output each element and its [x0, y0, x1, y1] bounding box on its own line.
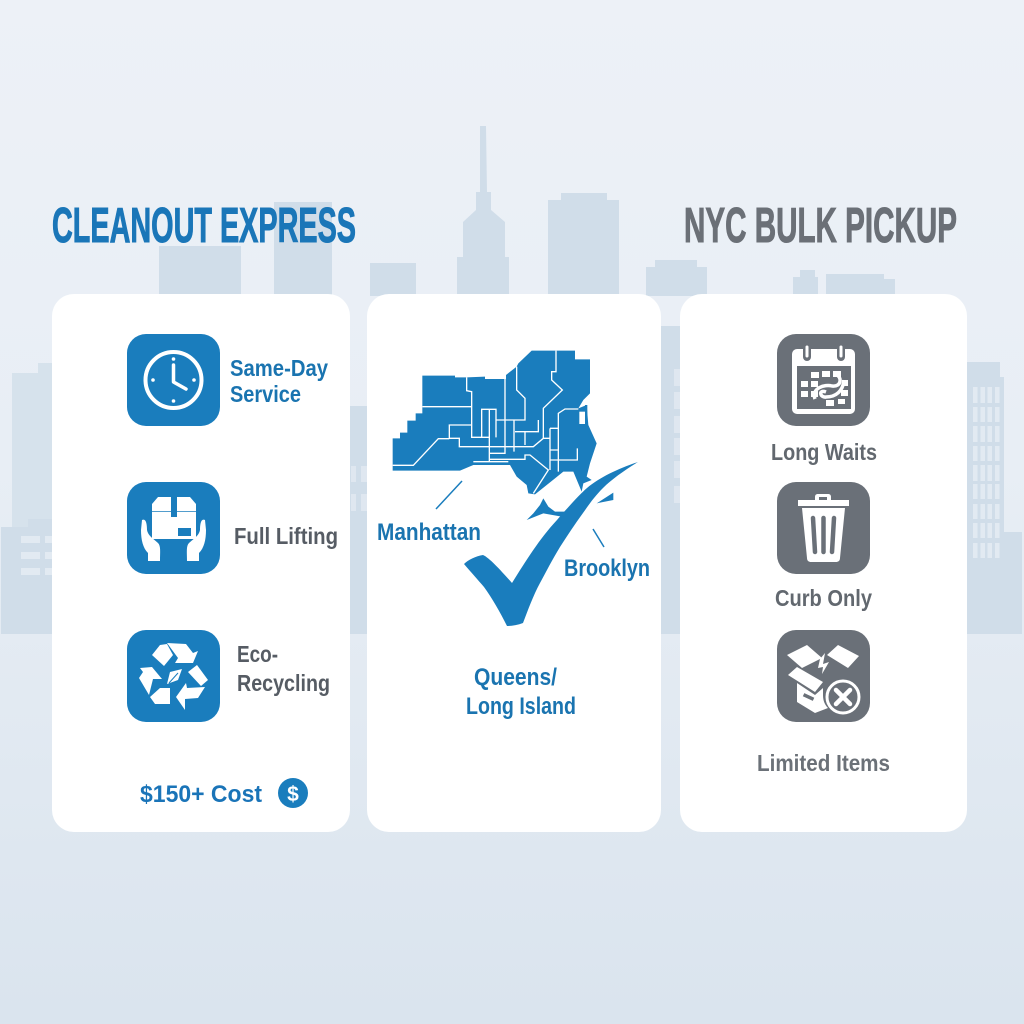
pointer: Brooklyn [593, 529, 604, 547]
panel: coverage map [367, 294, 661, 832]
panel: NYC Bulk Pickup [680, 294, 967, 832]
icon: clock [127, 334, 220, 426]
label: $150+ Cost: $150+ Cost [140, 781, 262, 808]
icon: recycling with leaf [127, 630, 220, 722]
label: Eco-Recycling: Eco- [237, 641, 278, 667]
icon: calendar [777, 334, 870, 426]
label: Long Waits: Long Waits [771, 439, 877, 465]
label: Curb Only: Curb Only [775, 585, 872, 611]
icon: dollar coin: $ [287, 783, 299, 806]
label: Eco-Recycling: Recycling [237, 670, 330, 696]
label: Eco-Recycling [237, 641, 330, 696]
panel: Cleanout Express [52, 294, 350, 832]
skyline silhouette [1, 126, 1022, 634]
pointer: Manhattan [436, 481, 462, 509]
label: Queens / Long Island: Queens/ [474, 664, 557, 691]
icon: broken box with x [777, 630, 870, 722]
label: Limited Items: Limited Items [757, 750, 890, 776]
label: Same-Day Service: Service [230, 381, 301, 407]
title: Cleanout Express: CLEANOUT EXPRESS [52, 199, 356, 253]
icon: trash can [777, 482, 870, 574]
label: Queens / Long Island: Long Island [466, 693, 576, 720]
label: Manhattan: Manhattan [377, 519, 481, 546]
label: Same-Day Service [230, 355, 328, 407]
label: Queens / Long Island [466, 664, 576, 720]
icon: hands holding box [127, 482, 220, 574]
icon: check mark [464, 462, 638, 626]
map: service area [393, 351, 613, 520]
label: Brooklyn: Brooklyn [564, 555, 650, 582]
icon: dollar coin [278, 778, 308, 808]
label: Full Lifting: Full Lifting [234, 523, 338, 549]
label: Same-Day Service: Same-Day [230, 355, 328, 381]
